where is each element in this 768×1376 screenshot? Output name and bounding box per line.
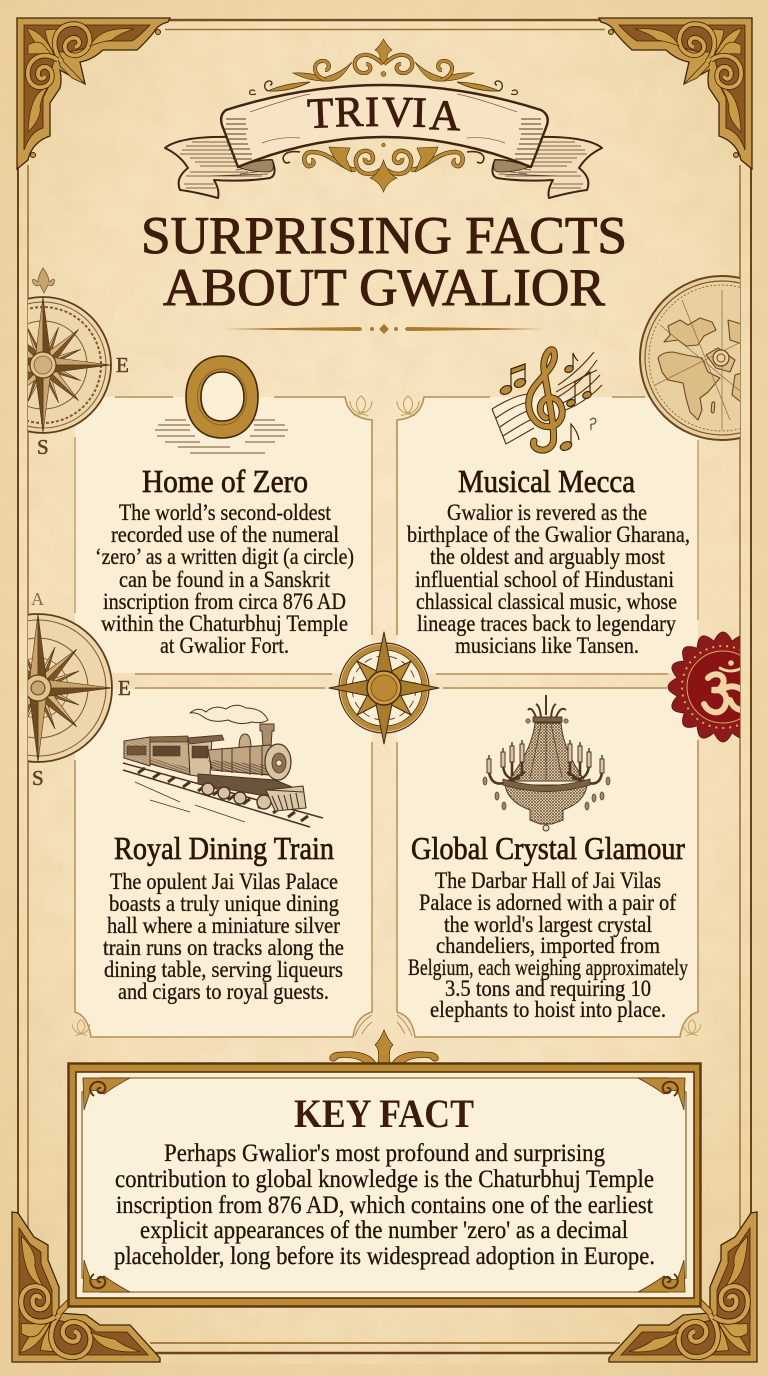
- ribbon tails: [165, 137, 602, 198]
- dome: [239, 734, 251, 748]
- card body text: [407, 500, 690, 658]
- card body text: musicians like Tansen.: [455, 633, 639, 658]
- card heading: Home of Zero: [142, 463, 308, 499]
- key fact heading: KEY FACT: [294, 1091, 474, 1136]
- crown ornament: [330, 1030, 438, 1063]
- track: [123, 763, 323, 827]
- illustration: chandelier: [483, 695, 610, 831]
- illustration: steam train: [123, 705, 323, 827]
- frame: [68, 1064, 700, 1306]
- candle flames: [489, 740, 602, 759]
- card body text: chlassical classical music, whose: [416, 589, 677, 614]
- key fact text: [114, 1140, 655, 1270]
- corner scrolls: [83, 1078, 685, 1292]
- smokebox front: [265, 744, 291, 780]
- corner ornament: top right: [599, 18, 752, 169]
- icon: compass rose upper left: [28, 267, 112, 434]
- card heading: Global Crystal Glamour: [411, 830, 685, 866]
- compass letter E: E: [118, 676, 131, 700]
- card body text: chandeliers, imported from: [436, 933, 660, 958]
- card body text: birthplace of the Gwalior Gharana,: [407, 522, 690, 547]
- card body text: the world's largest crystal: [444, 912, 652, 937]
- key fact text: Perhaps Gwalior's most profound and surprising: [164, 1140, 605, 1167]
- icon: compass rose lower left: [28, 613, 113, 763]
- hanging drops: [483, 777, 610, 810]
- frame: [198, 774, 292, 795]
- corner ornament: top left: [17, 18, 170, 169]
- main title: ABOUT GWALIOR: [163, 259, 606, 317]
- key fact text: contribution to global knowledge is the Chaturbhuj Temple: [115, 1166, 654, 1193]
- icon: central compass medallion: [329, 632, 439, 744]
- boiler: [208, 745, 280, 776]
- icon: zero numeral: [155, 356, 288, 453]
- rear coach: [124, 737, 150, 766]
- card heading: Musical Mecca: [458, 463, 635, 499]
- card body text: dining table, serving liqueurs: [104, 957, 343, 982]
- africa: [658, 352, 720, 420]
- compass letter S: S: [37, 435, 49, 459]
- icon: antique globe map: [639, 275, 740, 441]
- card heading: Royal Dining Train: [114, 830, 334, 866]
- trivia ribbon banner: [165, 39, 602, 198]
- corner flower: [397, 396, 419, 416]
- card body text: and cigars to royal guests.: [118, 979, 329, 1004]
- panel: musical mecca: [397, 350, 698, 673]
- wheels: [202, 783, 271, 809]
- card body text: hall where a miniature silver: [107, 913, 340, 938]
- row divider lines: [135, 674, 668, 1036]
- card body text: inscription from circa 876 AD: [103, 589, 346, 614]
- card body text: Gwalior is revered as the: [447, 500, 647, 525]
- chimney: [260, 724, 274, 747]
- compass letter N: A: [31, 589, 44, 609]
- compass letter S: S: [32, 766, 44, 790]
- key fact text: explicit appearances of the number 'zero' as a decimal: [140, 1217, 628, 1244]
- corner ornament: bottom left: [12, 1212, 160, 1362]
- card body text: Palace is adorned with a pair of: [419, 890, 676, 915]
- bowl: [505, 785, 587, 824]
- main title: SURPRISING FACTS: [141, 207, 627, 265]
- card body text: Belgium, each weighing approximately: [408, 955, 688, 980]
- card body text: within the Chaturbhuj Temple: [101, 611, 348, 636]
- key fact text: inscription from 876 AD, which contains one of the earliest: [116, 1192, 653, 1219]
- smoke: [190, 705, 268, 724]
- fleur-de-lis: [33, 268, 54, 293]
- cab: [188, 736, 212, 778]
- candles: [487, 744, 604, 773]
- card body text: 3.5 tons and requiring 10: [445, 976, 651, 1001]
- corner flower: [683, 1020, 701, 1036]
- corner flower: [350, 396, 372, 416]
- compass letter E: E: [116, 353, 129, 377]
- card body text: [95, 500, 354, 658]
- panel: home of zero: [75, 356, 372, 673]
- middle coach: [150, 737, 190, 775]
- ribbon heading: TRIVIA: [306, 89, 462, 140]
- card body text: train runs on tracks along the: [103, 935, 344, 960]
- card body text: [103, 869, 344, 1004]
- panel: global crystal glamour: [397, 689, 701, 1037]
- card body text: recorded use of the numeral: [111, 522, 339, 547]
- card body text: lineage traces back to legendary: [417, 611, 676, 636]
- card body text: The Darbar Hall of Jai Vilas: [435, 868, 661, 893]
- card body text: ‘zero’ as a written digit (a circle): [95, 544, 354, 569]
- cowcatcher: [266, 786, 306, 811]
- europe: [664, 318, 716, 346]
- main title: [141, 207, 627, 317]
- card body text: the oldest and arguably most: [430, 544, 666, 569]
- arms: [489, 762, 602, 784]
- ornament below ribbon: [283, 143, 484, 192]
- title divider: [223, 324, 544, 334]
- icon: red om seal: [668, 632, 740, 742]
- panel: key fact: [68, 1030, 700, 1306]
- icon: music notes and treble clef: [492, 350, 602, 452]
- card body text: can be found in a Sanskrit: [119, 567, 331, 592]
- arabia and india: [706, 348, 735, 372]
- panel: royal dining train: [72, 689, 372, 1037]
- card body text: The opulent Jai Vilas Palace: [110, 869, 338, 894]
- card body text: [408, 868, 688, 1022]
- ornament above ribbon: [250, 39, 517, 95]
- crystal basket: [508, 723, 585, 781]
- card body text: at Gwalior Fort.: [160, 633, 289, 658]
- corner flower: [72, 1020, 90, 1036]
- ribbon band: [221, 85, 548, 167]
- card body text: boasts a truly unique dining: [109, 891, 339, 916]
- card body text: The world’s second-oldest: [119, 500, 332, 525]
- corner ornament: bottom right: [609, 1212, 757, 1362]
- card body text: influential school of Hindustani: [415, 567, 674, 592]
- card body text: elephants to hoist into place.: [430, 997, 666, 1022]
- key fact text: placeholder, long before its widespread adoption in Europe.: [114, 1243, 655, 1270]
